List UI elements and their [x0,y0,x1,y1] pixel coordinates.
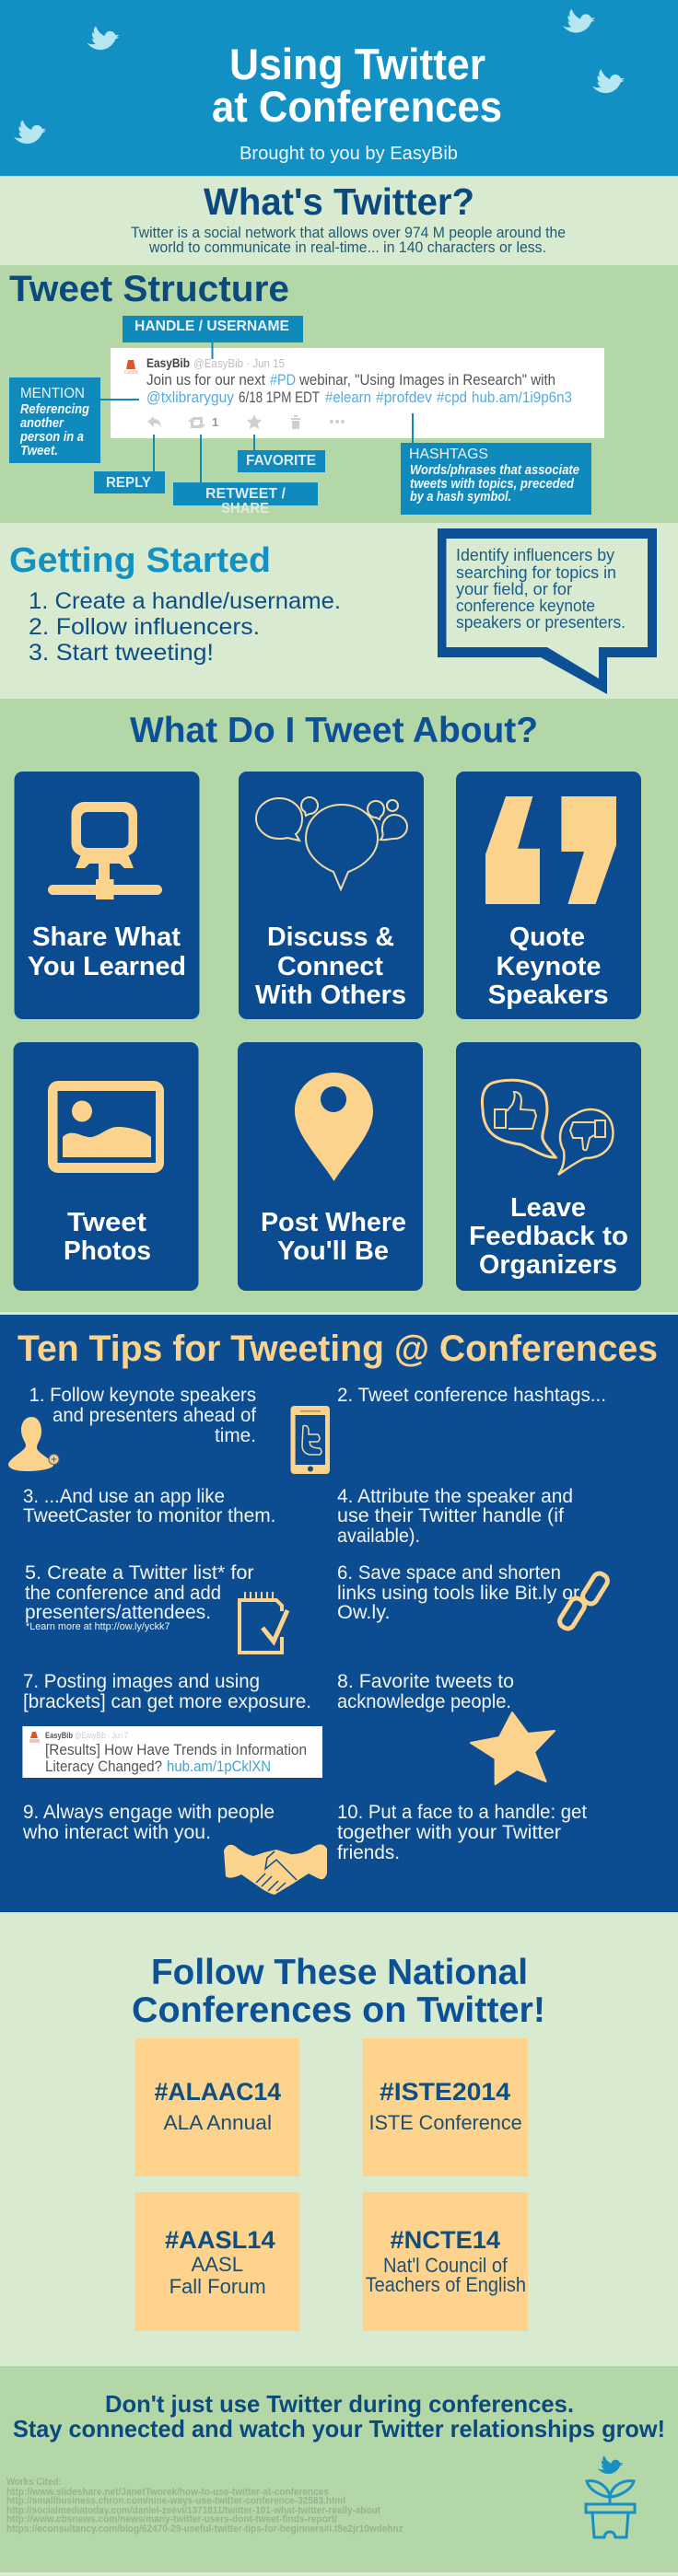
callout: mention: Tweet. [20,443,58,458]
callout: hashtags: tweets with topics, preceded [410,476,575,492]
label: Photos [64,1236,151,1266]
callout: handle / username: HANDLE / USERNAME [134,319,289,334]
panel: tweet structure [0,265,678,523]
label: Connect [277,952,383,981]
tip 3: 3. ...And use an app like [23,1486,225,1507]
works cited: http://www.cbsnews.com/news/many-twitter-users-dont-tweet-finds-report/ [6,2513,337,2524]
icon: speech bubbles [256,797,407,889]
card: NCTE: Nat'l Council of [383,2254,508,2277]
tip 3 [23,1486,276,1526]
icon: location pin [295,1073,373,1181]
card: AASL: AASL [192,2253,243,2276]
works cited: Works Cited: [6,2477,62,2488]
subtitle: Brought to you by EasyBib [240,144,458,164]
label [255,922,406,1010]
card: ALA [134,2038,299,2176]
callout: retweet / share: RETWEET / [205,486,286,502]
closing message: Stay connected and watch your Twitter relationships grow! [13,2415,665,2443]
callout: mention [9,377,139,463]
tip 4: use their Twitter handle (if [337,1505,564,1526]
tweet card [111,348,604,438]
callout: hashtags: HASHTAGS [409,447,488,462]
tip 3: TweetCaster to monitor them. [23,1505,276,1526]
tweet example: @EasyBib · Jun 7 [75,1731,128,1740]
card: NCTE: Teachers of English [366,2273,526,2296]
heading [132,1953,545,2030]
card: discuss and connect [239,772,424,1019]
tip 10: friends. [337,1842,400,1863]
icon: EasyBib logo [124,360,138,376]
tweet card: webinar, "Using Images in Research" with [298,371,555,389]
panel: ten tips [0,1312,678,1912]
tweet card: Join us for our next [146,371,265,389]
icon: networked computer [48,802,162,899]
callout: speech bubble tip: conference keynote [456,597,595,615]
heading: What's Twitter? [204,180,474,223]
tip 8 [337,1671,514,1712]
icon: bird middle right [591,68,625,99]
tweet example: [Results] How Have Trends in Information [45,1741,307,1758]
icon: phone with Twitter t [291,1406,330,1474]
callout: mention: another [20,415,64,431]
tip 9 [22,1802,275,1843]
callout: mention: Referencing [20,401,89,417]
callout: reply [94,435,165,493]
tweet card: #PD [270,371,296,389]
closing message [13,2390,665,2443]
tip 4: 4. Attribute the speaker and [337,1486,573,1507]
panel: header [0,0,678,177]
tip 5: presenters/attendees. [25,1602,211,1623]
works cited [6,2477,403,2535]
tip 5: 5. Create a Twitter list* for [25,1562,254,1584]
tweet card: #profdev [376,389,432,406]
panel: getting started [0,523,678,699]
panel: what's Twitter [0,177,678,266]
icon: EasyBib logo: EasyBib [124,370,138,376]
tip 1 [29,1385,256,1446]
icon: bird lower left [13,119,47,149]
tweet card: @txlibraryguy [146,389,234,406]
heading: Conferences on Twitter! [132,1990,545,2030]
tip 6: Ow.ly. [337,1602,391,1623]
tip 1: 1. Follow keynote speakers [29,1385,256,1406]
tip 7: [brackets] can get more exposure. [23,1691,311,1712]
tweet example: hub.am/1pCklXN [167,1758,271,1775]
label: Share What [32,922,181,952]
callout: retweet / share: SHARE [221,501,269,516]
label: Keynote [496,952,601,981]
tip 1: time. [215,1425,256,1446]
tip 9: 9. Always engage with people [23,1802,275,1823]
card: AASL [134,2192,299,2331]
works cited: http://www.slideshare.net/JanetTworek/how-to-use-twitter-at-conferences [6,2487,329,2498]
list: steps [29,588,341,666]
icon: notepad with check [240,1592,287,1653]
label: Speakers [488,981,609,1010]
callout: speech bubble tip: your field, or for [456,580,572,598]
tweet card: #elearn [325,389,371,406]
label: Post Where [261,1208,406,1237]
works cited: https://econsultancy.com/blog/62470-29-useful-twitter-tips-for-beginners#i.t8e2jr10wdehnz [6,2524,403,2535]
tip 6: links using tools like Bit.ly or [337,1583,579,1604]
callout: handle / username [123,316,303,359]
callout: hashtags: by a hash symbol. [410,489,511,505]
heading: Tweet Structure [9,269,289,309]
callout: favorite [238,435,325,472]
tip 8: acknowledge people. [337,1691,511,1712]
card: NCTE: #NCTE14 [391,2226,500,2254]
tip 4: available). [337,1526,420,1547]
heading: Ten Tips for Tweeting @ Conferences [18,1329,658,1369]
title: Using Twitter [229,40,485,88]
icon: chain link [557,1571,610,1631]
callout: hashtags: Words/phrases that associate [410,462,579,478]
tip 6 [337,1562,579,1623]
icon: thumbs in speech bubbles [482,1080,613,1175]
tweet card: #cpd [437,389,467,406]
callout: speech bubble tip: Identify influencers by [456,546,614,564]
label [469,1193,628,1280]
icon: bird top right [562,7,596,39]
text block: definition: world to communicate in real-time... in 140 characters or less. [148,238,546,256]
icon: plant with Twitter bird [586,2454,635,2537]
heading: Getting Started [9,541,271,580]
icon: photo [48,1081,164,1173]
label [261,1208,406,1266]
label [64,1208,151,1266]
card: AASL: Fall Forum [170,2275,266,2298]
card: ISTE: ISTE Conference [368,2111,522,2134]
heading: What Do I Tweet About? [130,711,538,750]
card: ALA: ALA Annual [164,2111,272,2134]
list: steps: 1. Create a handle/username. [29,588,341,614]
label: Feedback to [469,1222,628,1251]
card: NCTE [363,2192,528,2331]
card: ALA: #ALAAC14 [155,2078,281,2106]
icon: bird top left [87,25,120,55]
panel: closing [0,2366,678,2576]
tweet card: 6/18 1PM EDT [239,389,320,406]
icon: handshake [224,1844,327,1895]
label: Tweet [67,1208,146,1237]
card: quote keynote speakers [456,772,641,1019]
callout: mention: person in a [19,429,84,445]
list: steps: 3. Start tweeting! [29,640,214,666]
icon row: tweet actions: 1 [212,415,218,429]
card: tweet photos [13,1042,199,1291]
icon: quotation marks [485,796,616,904]
tip 10 [337,1802,587,1863]
callout: reply: REPLY [106,475,151,491]
icon: person add [8,1417,59,1471]
card: ISTE: #ISTE2014 [380,2078,510,2106]
tweet card: EasyBib [146,355,190,370]
tip 1: and presenters ahead of [53,1405,256,1426]
text block: definition [131,224,566,256]
list: steps: 2. Follow influencers. [29,614,260,640]
label [488,922,609,1010]
callout: hashtags [401,413,591,515]
tip 9: who interact with you. [22,1822,211,1843]
card: share what you learned [15,772,199,1019]
callout: speech bubble tip: speakers or presenters. [456,613,625,632]
callout: favorite: FAVORITE [246,453,316,469]
label: Quote [509,922,585,952]
label: You'll Be [277,1236,389,1266]
text block: definition: Twitter is a social network that allows over 974 M people around the [131,224,566,241]
tip 5: *Learn more at http://ow.ly/yckk7 [26,1621,170,1632]
icon: star [471,1712,555,1784]
tip 7: 7. Posting images and using [23,1671,260,1692]
tweet card: @EasyBib · Jun 15 [193,356,285,370]
tip 5 [25,1562,254,1632]
label: Leave [510,1193,586,1223]
panel: national conferences [0,1912,678,2366]
tip 2: 2. Tweet conference hashtags... [337,1385,606,1406]
works cited: http://socialmediatoday.com/daniel-zeevi/1371811/twitter-101-what-twitter-really-about [6,2505,380,2516]
card: post where you'll be [238,1042,423,1291]
card: ISTE [363,2038,528,2176]
tip 7 [23,1671,311,1712]
card: leave feedback [456,1042,641,1291]
tip 10: 10. Put a face to a handle: get [337,1802,587,1823]
heading: Follow These National [151,1953,528,1992]
label: With Others [255,981,406,1010]
works cited: http://smallbusiness.chron.com/nine-ways-use-twitter-conference-32583.html [6,2495,345,2506]
tweet example: EasyBib [45,1731,73,1740]
tip 4 [337,1486,573,1547]
label: Organizers [479,1250,617,1280]
callout: mention: MENTION [20,386,85,401]
title [212,40,502,131]
callout: retweet / share [173,435,318,516]
icon row: tweet actions [147,414,345,429]
card: AASL: #AASL14 [165,2226,275,2254]
label: You Learned [28,952,186,981]
closing message: Don't just use Twitter during conferences. [105,2390,574,2418]
label: Discuss & [267,922,394,952]
tip 8: 8. Favorite tweets to [337,1671,514,1692]
tweet example [22,1726,322,1778]
tip 5: the conference and add [25,1583,221,1604]
title: at Conferences [212,82,502,131]
callout: speech bubble tip: searching for topics in [456,563,616,582]
tip 10: together with your Twitter [337,1822,561,1843]
label [28,922,186,981]
callout: speech bubble tip [438,528,657,694]
tweet card: hub.am/1i9p6n3 [472,389,572,406]
tip 6: 6. Save space and shorten [337,1562,561,1584]
tweet example: Literacy Changed? [45,1758,162,1775]
panel: what do I tweet about [0,699,678,1312]
